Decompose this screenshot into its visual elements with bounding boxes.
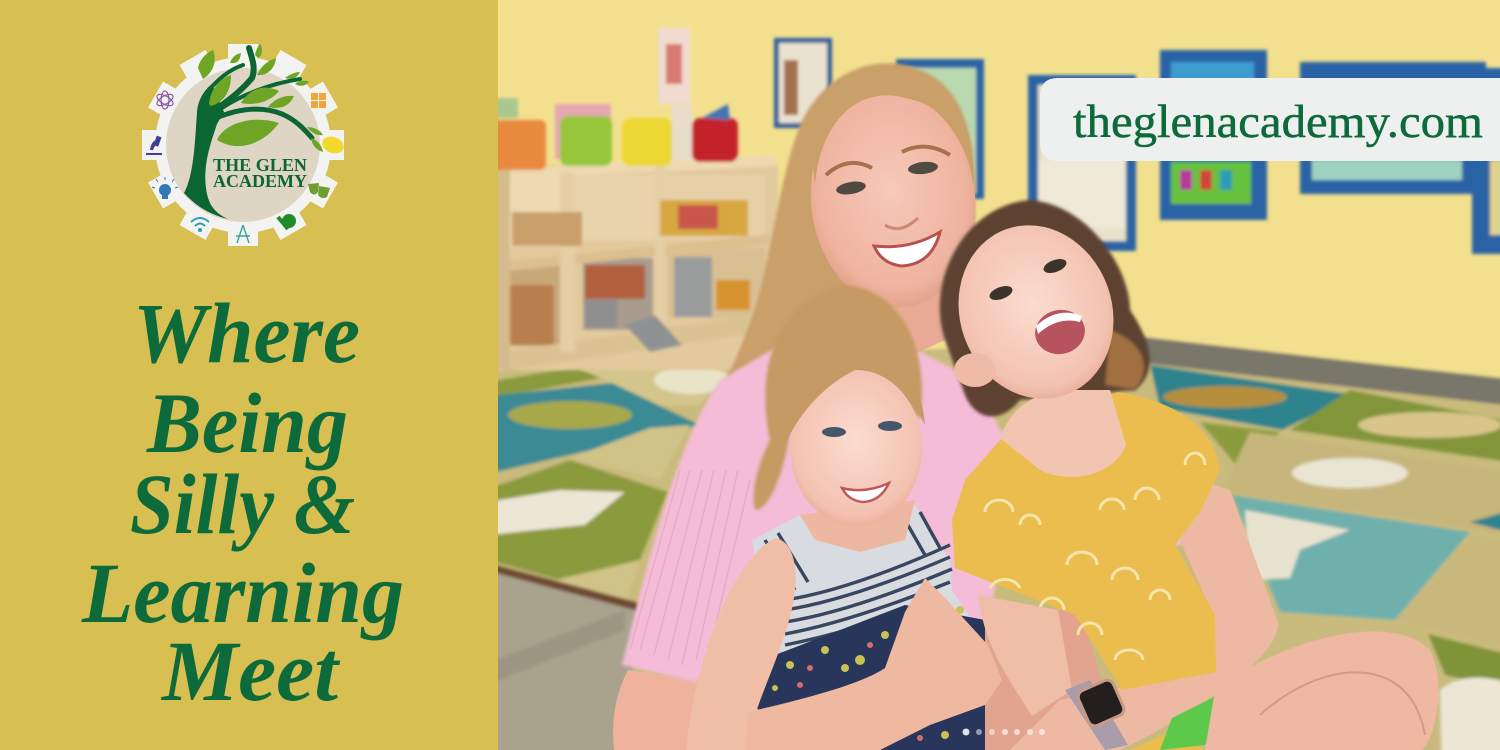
- older girl curly hair: [940, 200, 1150, 416]
- logo wordmark: [213, 155, 307, 191]
- older girl yellow dress: [952, 392, 1220, 690]
- floral skirt: [752, 605, 985, 750]
- younger girl striped top: [752, 505, 970, 652]
- tree branches: [205, 48, 312, 138]
- older girl curls highlight: [1105, 330, 1144, 390]
- tree trunk: [184, 84, 228, 219]
- icon: wifi: [191, 218, 209, 231]
- woman arm lower left: [613, 670, 760, 750]
- woman forehead hair edge: [814, 92, 973, 184]
- logo wordmark: THE GLEN: [213, 155, 307, 175]
- logo tree trunk and branches: [184, 48, 312, 219]
- heading: Where Being Silly & Learning Meet: Where: [133, 285, 360, 381]
- icon: wrench and gear: [278, 214, 296, 229]
- logo wordmark: ACADEMY: [213, 171, 307, 191]
- older girl open mouth: [1035, 310, 1085, 354]
- carousel dots: [962, 728, 1045, 736]
- wooden shelf with toy bins: [480, 28, 778, 375]
- older girl arm right and woman forearm: [1000, 480, 1278, 750]
- woman nose: [885, 218, 918, 229]
- legs: [1205, 631, 1439, 750]
- younger girl arm: [686, 538, 796, 750]
- heading: Where Being Silly & Learning Meet: [81, 285, 404, 719]
- woman hair: [726, 62, 978, 378]
- photo background: wall and carpet: [470, 0, 1500, 750]
- younger girl neck: [800, 500, 915, 552]
- logo leaves: [198, 44, 323, 152]
- pill background: [1040, 78, 1500, 161]
- panel: mustard left column: [0, 0, 498, 750]
- girl in striped top: [686, 285, 1002, 750]
- younger girl face: [790, 370, 922, 526]
- dress rainbow prints: [985, 453, 1205, 660]
- logo beige disc: [166, 68, 320, 222]
- panel: classroom photo: [470, 0, 1500, 750]
- older girl neck: [1000, 390, 1126, 477]
- icon: atom: [155, 91, 175, 109]
- woman neck: [892, 290, 946, 354]
- stripes: [765, 512, 952, 645]
- icon: compass: [236, 225, 250, 243]
- knee crease: [1260, 672, 1425, 735]
- woman smile: [874, 232, 940, 266]
- older girl ear: [954, 353, 996, 387]
- heading: Where Being Silly & Learning Meet: Learning: [81, 545, 404, 641]
- woman torso skin behind children: [985, 610, 1130, 750]
- woman forearm and hand on child: [745, 578, 1002, 750]
- woman face: [810, 95, 976, 308]
- woman: teacher with long blonde hair: [613, 63, 1228, 750]
- heading: Where Being Silly & Learning Meet: Meet: [160, 623, 341, 719]
- icon: calculator: [311, 93, 326, 108]
- younger girl hair: [754, 285, 922, 510]
- woman pink sweater: [620, 346, 1182, 684]
- smartwatch: [1065, 678, 1128, 750]
- older girl face: [958, 225, 1114, 398]
- icon: paint palette: [320, 134, 346, 156]
- girl in yellow dress: [934, 200, 1439, 750]
- website url pill: [1040, 78, 1500, 161]
- website url text: theglenacademy.com: [1073, 96, 1483, 148]
- icon: lightbulb: [152, 177, 178, 199]
- older girl eyes: [990, 259, 1066, 300]
- woman eyes and brows: [826, 147, 950, 197]
- wall posters: [774, 38, 1500, 254]
- dress hem at bottom: [1130, 732, 1205, 750]
- logo gear teeth: [142, 44, 344, 246]
- older girl arm lower: [978, 595, 1072, 716]
- younger girl eyes: [822, 421, 902, 437]
- younger girl smile: [842, 483, 889, 502]
- icon: theatre masks: [308, 183, 330, 198]
- logo: The Glen Academy gear and tree: [142, 44, 346, 246]
- sweater ribbing: [630, 470, 750, 665]
- heading: Where Being Silly & Learning Meet: Being: [146, 375, 348, 471]
- heading: Where Being Silly & Learning Meet: Silly &: [130, 456, 355, 552]
- older girl teeth: [1036, 313, 1082, 334]
- icon: microscope: [146, 136, 162, 155]
- green shorts: [1160, 690, 1228, 750]
- younger girl fringe: [786, 370, 925, 443]
